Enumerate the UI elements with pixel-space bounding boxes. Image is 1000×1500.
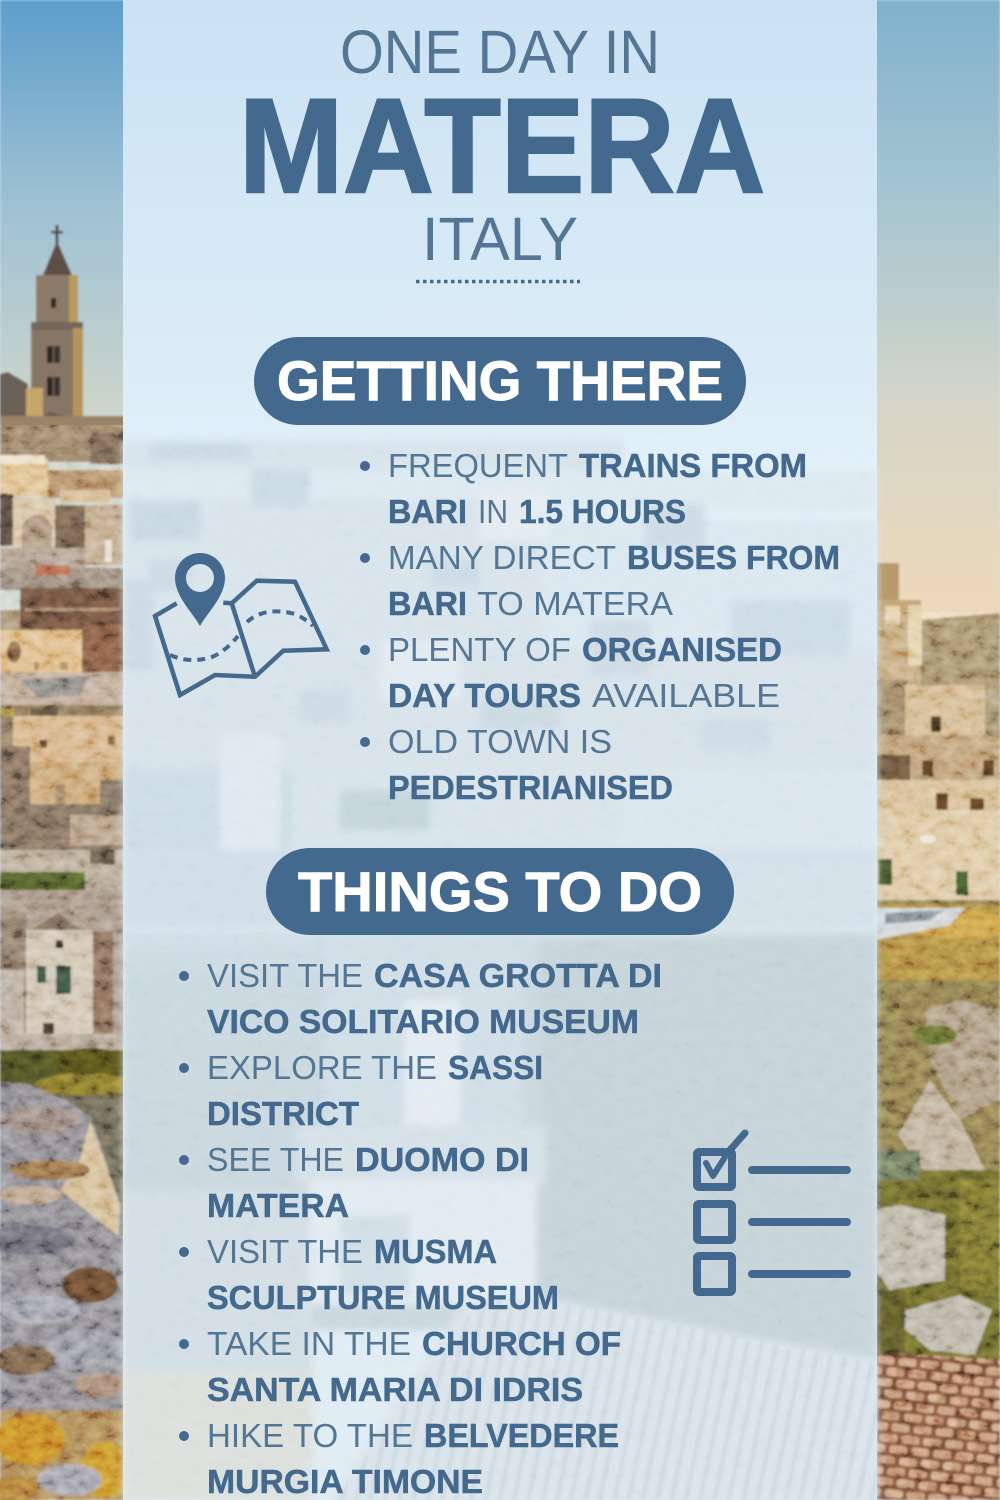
limestone rock and grass foreground bbox=[0, 1048, 135, 1500]
bullet: duomo: SEE THE bbox=[207, 1141, 344, 1178]
bullet: buses: BARI bbox=[388, 585, 467, 622]
bullet: trains bbox=[360, 447, 807, 530]
lower rocks and scrub bbox=[875, 1150, 1000, 1360]
bullet: santa maria di idris: CHURCH OF bbox=[422, 1325, 621, 1362]
town rooftops and houses bbox=[0, 372, 125, 1062]
heading pill: things to do: THINGS TO DO bbox=[298, 860, 702, 923]
bullet: trains: TRAINS FROM bbox=[579, 447, 807, 484]
bullet: pedestrian old town bbox=[360, 723, 673, 806]
bullet: musma bbox=[179, 1233, 559, 1316]
dotted divider under title bbox=[416, 280, 580, 283]
icon: checklist bbox=[697, 1133, 847, 1292]
bullet: buses: MANY DIRECT bbox=[388, 539, 616, 576]
bullet: santa maria di idris: TAKE IN THE bbox=[207, 1325, 411, 1362]
bullet: casa grotta bbox=[179, 957, 662, 1040]
bullet: sassi district: EXPLORE THE bbox=[207, 1049, 437, 1086]
bell tower bbox=[31, 225, 83, 422]
bullet: day tours bbox=[360, 631, 782, 714]
bullet: musma: MUSMA bbox=[374, 1233, 497, 1270]
bullet: buses: TO MATERA bbox=[477, 585, 673, 622]
faded hillside, bell tower and rooftop bbox=[123, 930, 877, 1500]
bullet: buses: BUSES FROM bbox=[627, 539, 840, 576]
bulleted list: getting there bbox=[360, 447, 840, 806]
bullet: casa grotta: VICO SOLITARIO MUSEUM bbox=[207, 1003, 639, 1040]
bullet: casa grotta: VISIT THE bbox=[207, 957, 363, 994]
title line: matera: MATERA bbox=[239, 72, 765, 221]
bullet: sassi district bbox=[179, 1049, 543, 1132]
bullet: day tours: DAY TOURS bbox=[388, 677, 581, 714]
bullet: duomo bbox=[179, 1141, 529, 1224]
background photo: left side, bell tower and old town bbox=[0, 0, 135, 1500]
bullet: belvedere: BELVEDERE bbox=[424, 1417, 619, 1454]
background photo: right side, houses, hillside and rooftop bbox=[875, 0, 1000, 1500]
bullet: belvedere bbox=[179, 1417, 619, 1500]
bullet: sassi district: SASSI bbox=[448, 1049, 543, 1086]
bullet: musma: VISIT THE bbox=[207, 1233, 363, 1270]
icon: folded map with location pin bbox=[155, 553, 327, 695]
heading pill: getting there: GETTING THERE bbox=[277, 349, 723, 412]
bullet: day tours: ORGANISED bbox=[582, 631, 782, 668]
bullet: santa maria di idris bbox=[179, 1325, 621, 1408]
bullet: sassi district: DISTRICT bbox=[207, 1095, 359, 1132]
bullet: belvedere: HIKE TO THE bbox=[207, 1417, 413, 1454]
bullet: duomo: MATERA bbox=[207, 1187, 349, 1224]
terracotta rooftop bbox=[875, 1352, 1000, 1500]
bullet: buses bbox=[360, 539, 840, 622]
bullet: santa maria di idris: SANTA MARIA DI IDRIS bbox=[207, 1371, 583, 1408]
heading pill: things to do bbox=[266, 848, 734, 935]
bullet: casa grotta: CASA GROTTA DI bbox=[374, 957, 662, 994]
bullet: duomo: DUOMO DI bbox=[355, 1141, 529, 1178]
title line: italy: ITALY bbox=[422, 205, 578, 273]
faded rooftop tiles bbox=[335, 1300, 877, 1500]
title bbox=[239, 18, 765, 273]
bullet: day tours: AVAILABLE bbox=[592, 677, 780, 714]
bullet: trains: FREQUENT bbox=[388, 447, 568, 484]
hillside with road and cars bbox=[875, 900, 1000, 1195]
heading pill: getting there bbox=[254, 337, 746, 425]
bullet: trains: 1.5 HOURS bbox=[519, 493, 686, 530]
bullet: pedestrian old town: OLD TOWN IS bbox=[388, 723, 612, 760]
bullet: belvedere: MURGIA TIMONE bbox=[207, 1463, 483, 1500]
translucent central panel with faded town photo bbox=[123, 0, 877, 1500]
bullet: day tours: PLENTY OF bbox=[388, 631, 571, 668]
bullet: musma: SCULPTURE MUSEUM bbox=[207, 1279, 559, 1316]
bullet: pedestrian old town: PEDESTRIANISED bbox=[388, 769, 673, 806]
bullet: trains: BARI bbox=[388, 493, 467, 530]
title line: one day in: ONE DAY IN bbox=[340, 18, 660, 86]
faded town buildings bbox=[123, 440, 877, 930]
bulleted list: things to do bbox=[179, 957, 662, 1500]
bullet: trains: IN bbox=[478, 493, 508, 530]
houses bbox=[875, 563, 1000, 900]
